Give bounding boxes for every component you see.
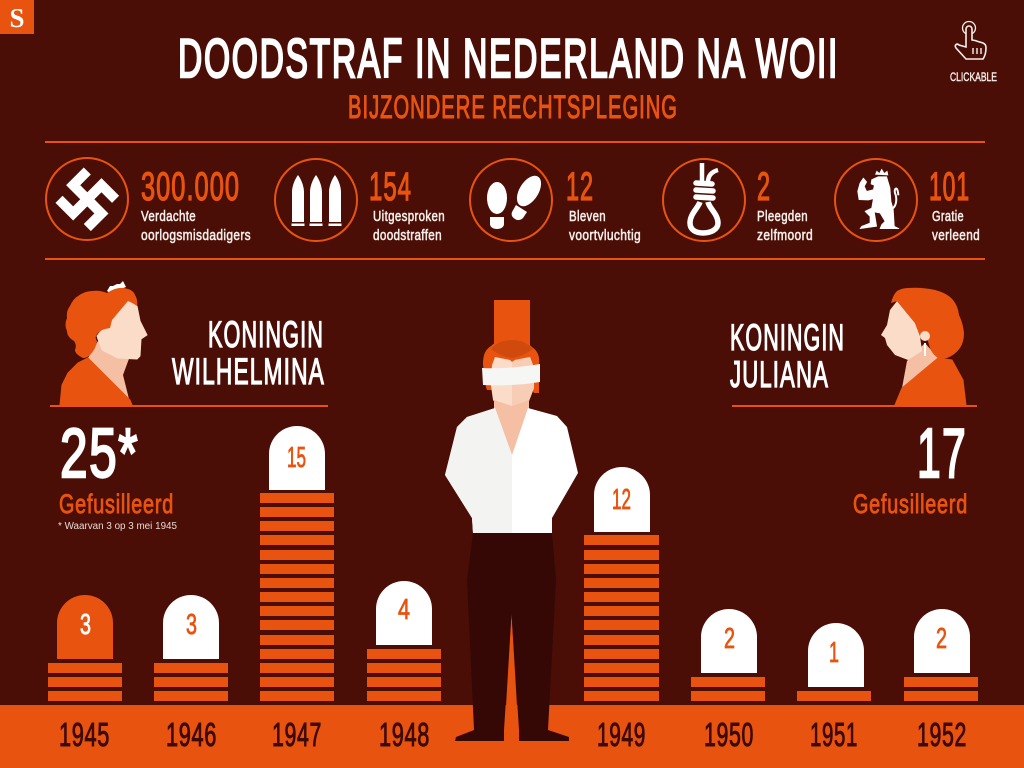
panel: Koningin Wilhelmina [50,281,328,532]
panel: Koningin Juliana: 17 [917,414,967,492]
blindfold [482,364,540,385]
stat: 2 suicides: zelfmoord [757,227,813,244]
subtitle: BIJZONDERE RECHTSPLEGING [348,89,678,125]
logo [0,0,34,34]
column 1951: 1951 [810,716,858,753]
central figure: blindfolded man [445,300,578,741]
stat: 154 death sentences: 154 [369,165,412,209]
hair [483,340,539,393]
panel: Koningin Wilhelmina: * Waarvan 3 op 3 mei 1945 [58,521,177,532]
stat: 154 death sentences: Uitgesproken [373,208,445,225]
stat: 12 fugitives [470,159,641,244]
column 1948 [367,581,441,753]
panel: Koningin Juliana: JULIANA [730,354,829,395]
column 1947: 15 [287,442,306,474]
column 1952 [904,609,978,753]
stat: 300.000 suspects: Verdachte [141,208,196,225]
column 1945 [48,595,122,753]
column 1946: 1946 [166,716,217,753]
column 1949 [584,467,659,753]
execution post [494,300,530,360]
stat: 101 pardons: Gratie [932,208,964,225]
column 1945: 3 [80,609,91,641]
panel: Koningin Wilhelmina: 25* [60,414,139,492]
panel: Koningin Wilhelmina: Gefusilleerd [59,489,174,519]
panel: Koningin Juliana [730,288,977,519]
stat: 154 death sentences [275,159,445,244]
portrait: Juliana [881,288,966,405]
logo: S [9,3,25,33]
chart: executions per year [48,426,978,753]
column 1952: 1952 [917,716,967,753]
panel: Koningin Juliana: KONINGIN [730,317,845,358]
stat: 300.000 suspects: 300.000 [141,165,240,209]
stat: 101 pardons: verleend [932,227,980,244]
stat: 12 fugitives: 12 [566,165,594,209]
stat: 300.000 suspects [46,158,251,244]
column 1948: 4 [398,594,410,626]
stat: 12 fugitives: Bleven [569,208,606,225]
column 1951 [797,623,871,753]
icon: clickable hand [950,22,997,84]
panel: Koningin Juliana: Gefusilleerd [853,489,968,519]
column 1949: 1949 [597,716,646,753]
column 1950: 2 [724,623,735,655]
stats panel [45,141,985,260]
panel: Koningin Wilhelmina: KONINGIN [208,314,324,355]
column 1947 [260,426,334,753]
stat: 101 pardons [835,159,980,244]
stat: 2 suicides [663,159,813,244]
panel: Koningin Wilhelmina: WILHELMINA [172,351,325,392]
stat: 300.000 suspects: oorlogsmisdadigers [141,227,251,244]
ground band [0,705,1024,768]
gap between legs [504,613,519,741]
trousers and shoes [455,533,569,741]
stat: 2 suicides: 2 [757,165,771,209]
column 1951: 1 [829,637,839,669]
neck [494,400,529,456]
portrait: Wilhelmina [60,281,147,405]
stat: 154 death sentences: doodstraffen [373,227,442,244]
face [491,357,534,410]
column 1946: 3 [186,609,197,641]
stat: 12 fugitives: voortvluchtig [569,227,641,244]
column 1950 [691,609,765,753]
column 1946 [154,595,228,753]
column 1947: 1947 [272,716,322,753]
icon: clickable hand: CLICKABLE [950,70,997,84]
column 1952: 2 [936,623,947,655]
column 1949: 12 [612,484,631,516]
stat: 101 pardons: 101 [929,165,970,209]
column 1948: 1948 [379,716,430,753]
stat: 2 suicides: Pleegden [757,208,808,225]
column 1945: 1945 [59,716,110,753]
column 1950: 1950 [704,716,754,753]
shirt [445,408,578,533]
